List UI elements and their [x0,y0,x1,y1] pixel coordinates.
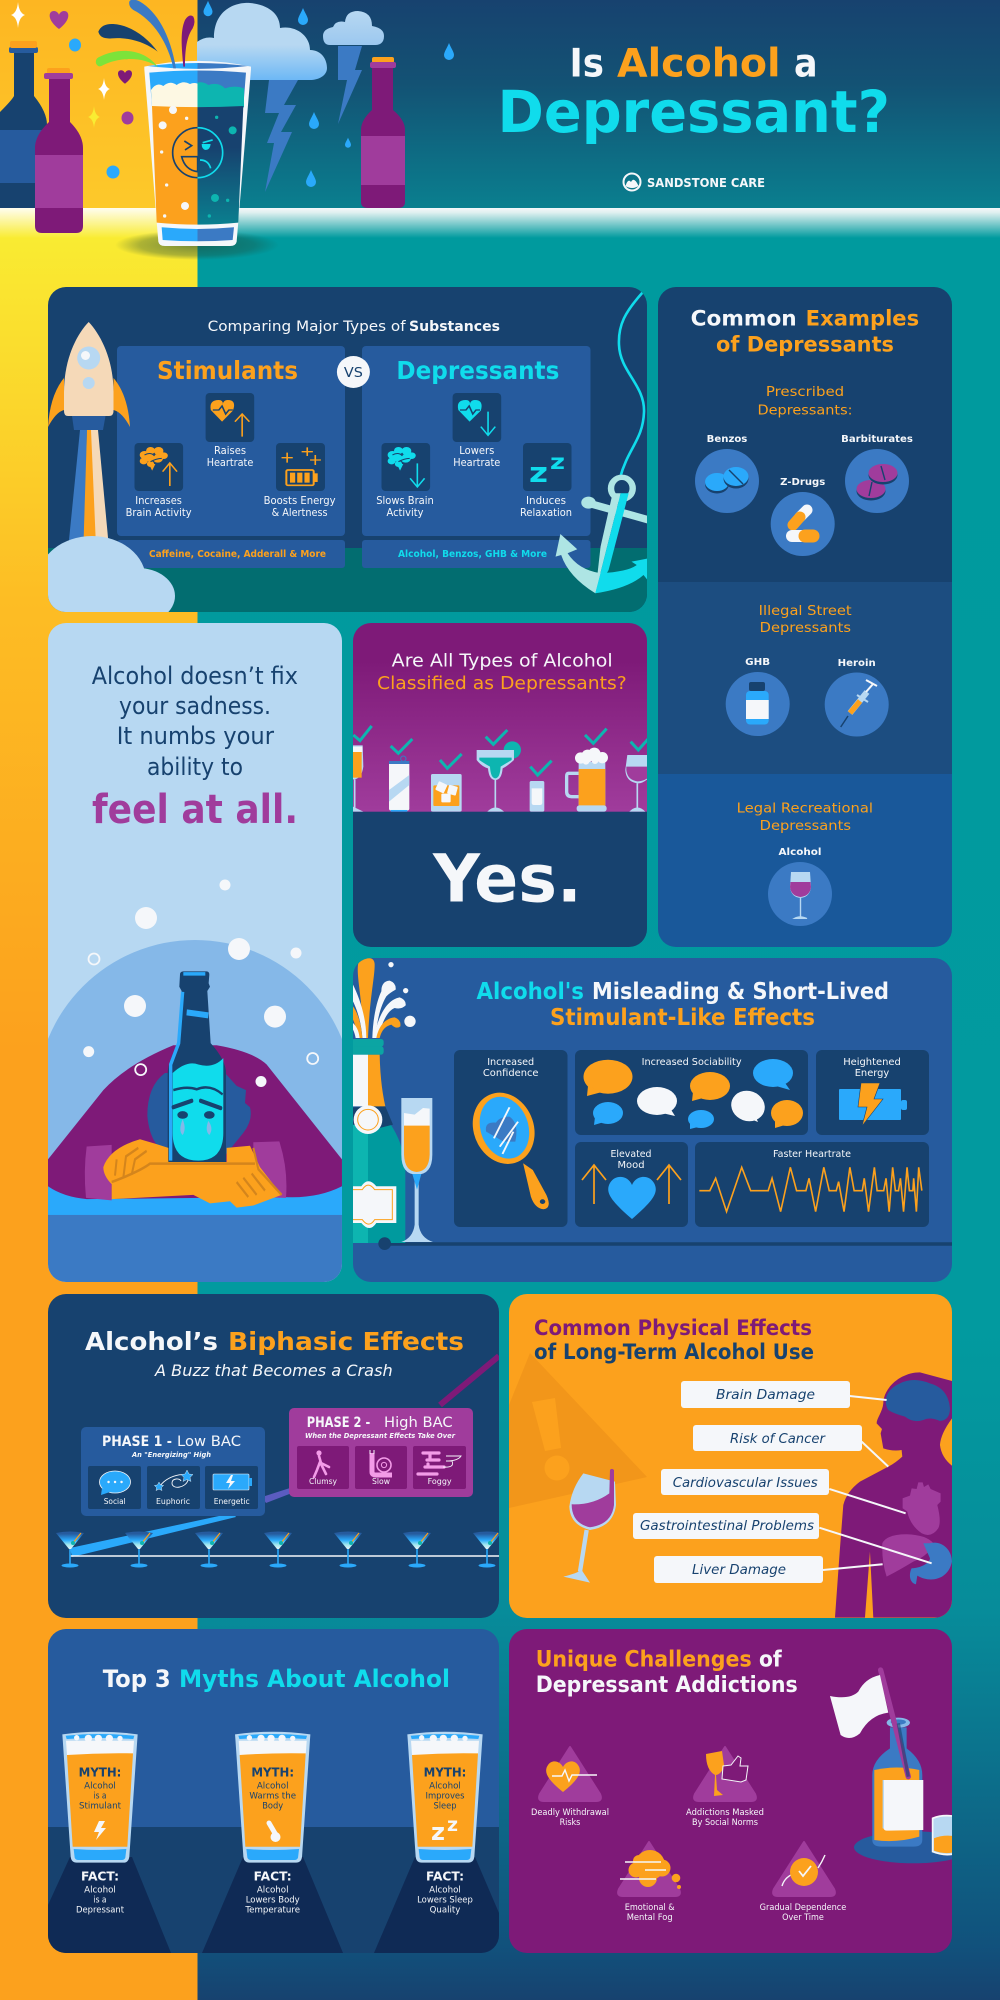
tile: clumsy [297,1446,349,1489]
item: deadly withdrawal risks: Deadly Withdrawal [531,1808,609,1818]
label: cardiovascular issues [661,1469,829,1495]
myth card 2: Lowers Body [246,1896,300,1906]
icon: spilling wine glass [563,1469,616,1583]
text: increases brain activity: Increases [135,495,182,507]
item: gradual dependence over time: Over Time [782,1913,824,1923]
text: raises heartrate: Heartrate [207,457,253,469]
card: heightened energy [816,1050,929,1135]
myth card 2 [235,1732,310,1916]
card: stimulants [117,346,345,568]
heading: Depressant Addictions [536,1673,798,1698]
card: faster heartrate [695,1142,929,1227]
subheading: prescribed: Depressants: [758,404,852,418]
heading: comparing major types: Substances [409,319,500,335]
item: addictions masked by social norms: By Social Norms [692,1818,759,1828]
item: barbiturates: Barbiturates [841,434,913,445]
icon: navy bottle [0,41,47,208]
heading: Alcohol’s [85,1327,218,1356]
heading: comparing major types [208,319,500,335]
icon: warning triangle [509,1353,647,1508]
heading: Classified as Depressants? [377,673,627,694]
text: stimulant examples: Caffeine, Cocaine, Adderall & More [149,549,326,560]
text: induces relaxation: Induces [526,495,566,507]
tile: foggy: Foggy [428,1477,452,1486]
label: risk of cancer: Risk of Cancer [730,1431,826,1447]
panel: are all types of alcohol [353,623,652,948]
panel: top 3 myths [48,1629,499,1953]
martini glasses [56,1532,501,1568]
glass shadow [115,230,279,260]
panel: comparing substances [38,287,649,624]
myth card 3: MYTH: [424,1766,466,1780]
subheading: illegal street: Illegal Street [759,604,852,619]
label: gastrointestinal problems: Gastrointestinal Problems [640,1518,814,1534]
heading: of [759,1648,782,1673]
panel: unique challenges [509,1629,973,1953]
myth card 2: MYTH: [251,1766,294,1780]
card: phase 2: PHASE 2 - [307,1415,370,1431]
icon: heart rate up [206,393,254,442]
myth card 3: Alcohol [429,1886,461,1896]
card: phase 1: An "Energizing" High [131,1451,211,1459]
item: addictions masked by social norms: Addictions Masked [686,1808,764,1818]
rocks glass [431,774,462,812]
icon: heart rate down [453,393,501,442]
text: boosts energy [264,495,336,519]
myth card 2: Alcohol [257,1782,289,1792]
logo: Sandstone Care [624,174,765,190]
beer mug [567,773,579,797]
text: raises heartrate: Raises [214,445,246,457]
icon: lightning bolts [265,46,362,192]
can [389,764,409,811]
icon: right purple bottle [361,57,405,208]
item: heroin: Heroin [838,658,876,669]
item: z-drugs: Z-Drugs [780,477,825,488]
card: phase 1 [81,1427,265,1516]
tile: clumsy: Clumsy [309,1477,337,1486]
label: cardiovascular issues: Cardiovascular Issues [673,1475,818,1491]
tile: social [88,1466,141,1509]
text: increases brain activity [126,495,192,519]
text: raises heartrate [207,445,253,469]
tile: slow: Slow [372,1477,390,1486]
myth card 3: Improves [426,1792,465,1802]
subheading: illegal street [759,604,852,636]
item: benzos: Benzos [707,434,747,445]
panel: alcohol doesn't fix your sadness [36,623,354,1283]
text: slows brain activity: Slows Brain [376,495,434,507]
label: brain damage [681,1381,850,1408]
wine [625,755,647,784]
text: lowers heartrate [453,445,500,469]
panel: biphasic effects [48,1294,501,1618]
icon: sleep zz: z [550,450,565,474]
myth card 1: Alcohol [84,1886,116,1896]
item: emotional and mental fog: Emotional & [625,1903,675,1913]
icon: rain drops [204,1,454,187]
champagne [353,745,363,779]
text: depressant examples: Alcohol, Benzos, GHB & More [398,549,547,560]
title: Alcohol [617,42,781,87]
card: increased confidence: Increased [487,1057,534,1068]
heading: Alcohol's [476,979,584,1005]
card: phase 1: Low BAC [177,1434,241,1450]
card: depressants [362,346,590,568]
icon: storm cloud [197,3,327,80]
item: emotional and mental fog: Mental Fog [627,1913,673,1923]
logo: Sandstone Care: SANDSTONE CARE [647,176,765,190]
icon: hand mirror [465,1088,549,1209]
badge: vs: VS [344,366,363,381]
icon: speech bubbles [584,1059,803,1129]
myth card 1: is a [94,1792,106,1802]
card: faster heartrate: Faster Heartrate [773,1149,851,1160]
heading [377,651,627,694]
label: liver damage [654,1556,823,1583]
heading: of Long-Term Alcohol Use [534,1340,814,1364]
myth card 2: FACT: [254,1870,292,1884]
item: addictions masked by social norms [686,1747,764,1828]
myth card 3: z [447,1814,458,1836]
icon: brain up [134,443,183,491]
myth card 3: Alcohol [429,1782,461,1792]
card: phase 2: High BAC [384,1415,453,1431]
tile: social: Social [104,1497,126,1506]
item: benzos [695,434,759,513]
item: gradual dependence over time: Gradual Dependence [760,1903,846,1913]
card: phase 1: PHASE 1 - [102,1434,172,1450]
card: heightened energy: Heightened [843,1057,901,1068]
myth card 1: Depressant [76,1906,125,1916]
text: quote: feel at all. [92,787,298,833]
myth card 1: Alcohol [84,1782,116,1792]
tile: foggy [413,1446,466,1489]
text: slows brain activity [376,495,434,519]
icon: champagne bottle splash and flute [351,958,433,1250]
item: heroin [825,658,889,736]
heading: Top 3 [103,1665,171,1693]
heading: Biphasic Effects [228,1327,464,1356]
subheading: legal recreational: Legal Recreational [737,802,873,816]
item: deadly withdrawal risks: Risks [560,1818,581,1828]
heading [534,1316,814,1364]
item: ghb: GHB [745,657,770,668]
card: increased confidence [454,1050,568,1227]
text: lowers heartrate: Heartrate [453,457,500,469]
icon: sleep zz: z [529,456,548,489]
item: alcohol [768,847,832,926]
panel: physical effects of long-term use [509,1294,967,1618]
card: elevated mood: Elevated [610,1149,652,1160]
myth card 2: Warms the [249,1792,296,1802]
text: induces relaxation [520,495,572,519]
heading [691,306,919,356]
text: induces relaxation: Relaxation [520,507,572,519]
drinks with check marks [353,726,652,812]
answer: yes: Yes. [432,841,582,918]
subheading: illegal street: Depressants [760,621,851,636]
myth card 1 [62,1732,138,1916]
card: increased sociability: Increased Sociability [642,1057,742,1068]
icon: small cloud [323,11,384,45]
icon: rope and anchor [556,292,649,593]
card: stimulants: Stimulants [157,356,298,385]
card: heightened energy: Energy [855,1068,889,1079]
badge: vs [337,356,370,388]
text: slows brain activity: Activity [386,507,424,519]
tile: euphoric [147,1466,200,1509]
card: depressants: Depressants [396,356,559,385]
icon: battery with plus signs [276,443,325,491]
chart: heartbeat line [699,1167,922,1212]
myth card 3 [407,1732,483,1916]
icon: brain down [382,443,430,491]
tile: energetic: Energetic [214,1497,250,1506]
card: elevated mood: Mood [618,1160,644,1171]
heading: A Buzz that Becomes a Crash [154,1361,393,1380]
myth card 1: Stimulant [79,1802,122,1812]
text: increases brain activity: Brain Activity [126,507,192,519]
text: boosts energy: & Alertness [272,507,328,519]
label: liver damage: Liver Damage [692,1562,786,1578]
heading [85,1327,464,1380]
text: quote: It numbs your [117,722,274,750]
heading: Stimulant-Like Effects [550,1005,815,1031]
heading: Examples [806,306,919,330]
card: increased sociability [575,1050,808,1135]
item: gradual dependence over time [760,1842,846,1923]
heading: Misleading & Short-Lived [592,979,889,1005]
card: elevated mood [575,1142,688,1227]
icon: heart with up arrows [582,1165,681,1219]
text: quote: Alcohol doesn’t fix [92,662,298,690]
title: Is [570,42,604,87]
heading: comparing major types: Comparing Major Types of [208,319,407,335]
subheading: legal recreational: Depressants [760,819,851,834]
label: brain damage: Brain Damage [716,1387,815,1403]
header illustration: bottles, glass, clouds [0,0,454,260]
title [498,42,890,146]
text: quote: your sadness. [119,692,271,720]
heading [476,979,889,1031]
heading [536,1648,798,1698]
heading: of Depressants [716,332,894,356]
heading: Unique Challenges [536,1648,752,1673]
myth card 3: Sleep [434,1802,456,1812]
panel: misleading stimulant-like effects [351,958,952,1282]
myth card 1: is a [94,1896,106,1906]
subheading: prescribed: Prescribed [766,385,844,400]
item: alcohol: Alcohol [778,847,822,858]
myth card 3: Quality [430,1906,460,1916]
myth card 3: z [431,1818,445,1846]
myth card 1: MYTH: [79,1766,121,1780]
item: ghb [726,657,790,736]
item: deadly withdrawal risks [531,1747,609,1828]
illustration: human silhouette with organs [819,1372,967,1618]
icon: rocket and clouds [48,322,175,612]
card: increased confidence: Confidence [483,1068,538,1079]
text: lowers heartrate: Lowers [459,445,494,457]
label: risk of cancer [693,1425,862,1451]
icon: purple bottle [35,68,83,233]
item: z-drugs [771,477,835,556]
icon: battery with bolt [839,1083,907,1126]
shelf and champagne [351,958,952,1250]
bubbles [83,880,318,1087]
chart: rising BAC line and timeline [56,1356,501,1568]
text: quote: ability to [147,753,243,781]
myth card 2: Alcohol [257,1886,289,1896]
heading: Are All Types of Alcohol [392,651,613,672]
card: phase 2: When the Depressant Effects Take Over [305,1432,456,1440]
tile: euphoric: Euphoric [156,1497,190,1506]
heading: Common Physical Effects [534,1316,812,1340]
subheading: legal recreational [737,802,873,834]
tile: energetic [205,1466,258,1509]
myth card 2: Body [262,1802,283,1812]
icon: sparkles and hearts on happy side [11,2,134,178]
myth card 1: FACT: [81,1870,119,1884]
panel: common examples of depressants [658,287,952,947]
icon: sleep zz [523,443,572,491]
title: Depressant? [498,78,890,146]
heading: Common [691,306,797,330]
heading: Myths About Alcohol [179,1665,450,1693]
icon: half happy half sad beer glass [144,61,251,246]
myth card 3: FACT: [426,1870,464,1884]
myth card 3: Lowers Sleep [417,1896,473,1906]
icon: bottle with white flag [830,1667,952,1864]
card: phase 2 [289,1408,473,1497]
margarita [504,741,521,759]
shot [530,781,544,812]
label: gastrointestinal problems [633,1513,819,1539]
icon: drink splash [96,0,195,68]
title: a [794,42,818,87]
tile: slow [355,1446,407,1489]
item: barbiturates [841,434,913,513]
illustration: sad person with bottle face [48,971,342,1283]
text: quote [92,662,298,833]
item: emotional and mental fog [618,1842,681,1923]
subheading: prescribed [758,385,852,418]
text: boosts energy: Boosts Energy [264,495,336,507]
myth card 2: Temperature [244,1906,300,1916]
